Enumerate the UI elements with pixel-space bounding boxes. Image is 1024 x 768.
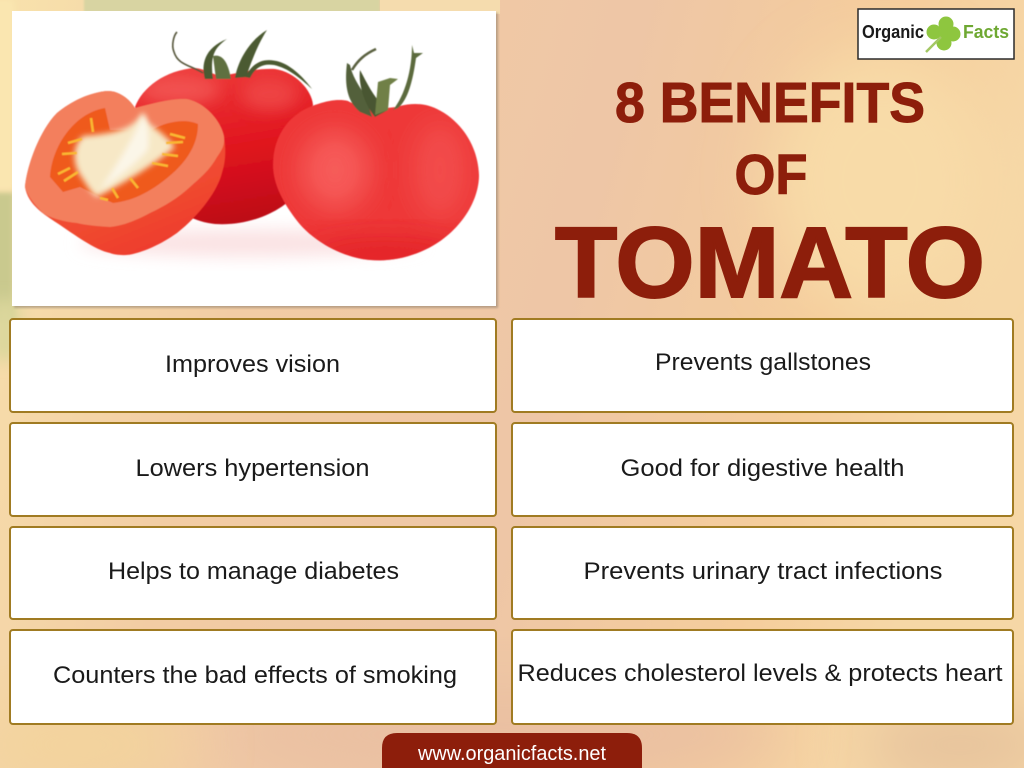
inner cavity bbox=[50, 108, 198, 203]
seed core bbox=[75, 112, 175, 197]
title bbox=[555, 71, 985, 319]
card: Counters the bad effects of smoking: Counters the bad effects of smoking bbox=[53, 662, 457, 689]
title line: 8 BENEFITS: 8 BENEFITS bbox=[615, 71, 925, 135]
card: Improves vision: Improves vision bbox=[165, 351, 340, 378]
footer: website URL tab bbox=[382, 733, 642, 768]
card: Prevents urinary tract infections: Prevents urinary tract infections bbox=[584, 558, 942, 585]
card: Prevents urinary tract infections bbox=[512, 527, 1013, 619]
logo: Organic Facts bbox=[858, 9, 1014, 59]
panel: benefits left column bbox=[10, 319, 496, 724]
icon: back tomato bbox=[135, 30, 313, 224]
card: Improves vision bbox=[10, 319, 496, 412]
logo text: Organic: Organic bbox=[862, 22, 924, 42]
card: Prevents gallstones: Prevents gallstones bbox=[655, 349, 871, 376]
panel: benefits right column bbox=[512, 319, 1013, 724]
card: Prevents gallstones bbox=[512, 319, 1013, 412]
card: Lowers hypertension bbox=[10, 423, 496, 516]
icon: back tomato stem bbox=[173, 30, 312, 89]
card: Reduces cholesterol levels & protects heart: Reduces cholesterol levels & protects heart bbox=[518, 660, 1003, 687]
icon: right tomato bbox=[273, 45, 479, 273]
icon: clover bbox=[926, 16, 960, 52]
footer: website URL tab: www.organicfacts.net bbox=[417, 743, 606, 765]
card: Counters the bad effects of smoking bbox=[10, 630, 496, 724]
card: Helps to manage diabetes: Helps to manage diabetes bbox=[108, 558, 399, 585]
card: Lowers hypertension: Lowers hypertension bbox=[136, 455, 370, 482]
icon: soft shadow under tomatoes bbox=[80, 229, 420, 257]
title line: TOMATO: TOMATO bbox=[555, 207, 985, 319]
logo text: Facts: Facts bbox=[963, 22, 1009, 42]
icon: cut tomato bbox=[25, 91, 225, 255]
card: Reduces cholesterol levels & protects heart bbox=[512, 630, 1013, 724]
card: Helps to manage diabetes bbox=[10, 527, 496, 619]
card: Good for digestive health bbox=[512, 423, 1013, 516]
icon: right tomato stem bbox=[346, 45, 423, 117]
card: Good for digestive health: Good for digestive health bbox=[620, 455, 904, 482]
title line: OF: OF bbox=[734, 143, 808, 207]
panel: tomato photo bbox=[12, 11, 498, 308]
